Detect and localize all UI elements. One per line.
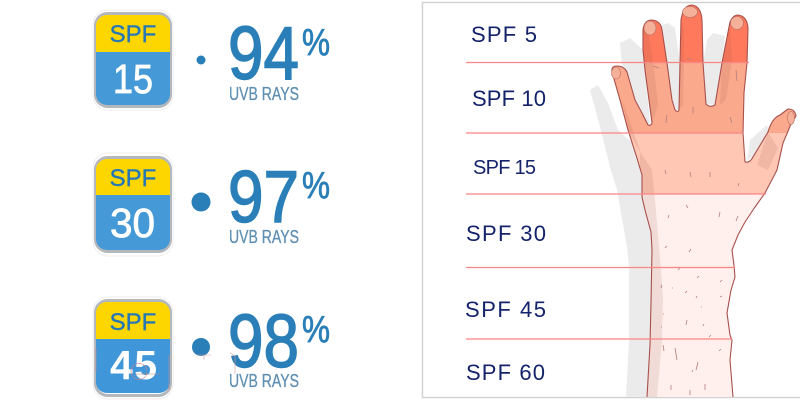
handwritten SPF labels: SPF 5: [471, 22, 537, 47]
hand outline: [612, 5, 796, 397]
badge: SPF 30: [93, 153, 173, 256]
SPF level lines: [466, 62, 766, 339]
value: 98 percent: %: [302, 309, 330, 351]
panel: hand illustration: [422, 0, 800, 400]
value: 97 percent: %: [302, 165, 330, 207]
badge: SPF 45: [93, 297, 173, 399]
badge: SPF 45: SPF: [110, 309, 156, 336]
handwritten SPF labels: SPF 30: [466, 221, 546, 246]
row: SPF 15 gives 94%: [93, 10, 330, 110]
caption: UVB rays: UVB RAYS: [229, 227, 299, 247]
value: 94 percent: %: [302, 22, 330, 64]
badge: SPF 30: SPF: [110, 165, 156, 192]
badge: SPF 45: 45: [110, 342, 157, 388]
caption: UVB rays: UVB RAYS: [229, 371, 299, 391]
hand with sunburn bands: [600, 0, 800, 400]
row: SPF 45 gives 98%: [93, 297, 330, 399]
handwritten SPF labels: SPF 15: [473, 157, 536, 179]
cast shadow: [590, 23, 769, 397]
dot: large marker: [192, 338, 210, 356]
value: 98 percent: 98: [228, 299, 299, 383]
badge: SPF 15: SPF: [110, 21, 156, 48]
row: SPF 30 gives 97%: [93, 153, 330, 256]
handwritten SPF labels: [465, 22, 546, 385]
badge: SPF 15: [93, 10, 173, 110]
faint sketch marks: [197, 353, 235, 374]
shading inside the hand: [612, 20, 778, 397]
caption: UVB rays: UVB RAYS: [229, 84, 299, 104]
fingernails: [612, 6, 794, 124]
badge: SPF 15: 15: [113, 56, 153, 102]
handwritten SPF labels: SPF 60: [466, 360, 545, 385]
hair and knuckle marks: [653, 59, 739, 395]
value: 97 percent: 97: [228, 157, 299, 238]
handwritten SPF labels: SPF 10: [472, 86, 546, 111]
value: 94 percent: 94: [228, 11, 299, 95]
dot: small marker: [196, 56, 206, 64]
handwritten SPF labels: SPF 45: [465, 297, 546, 322]
badge: SPF 30: 30: [110, 200, 155, 246]
dot: medium marker: [192, 192, 210, 212]
